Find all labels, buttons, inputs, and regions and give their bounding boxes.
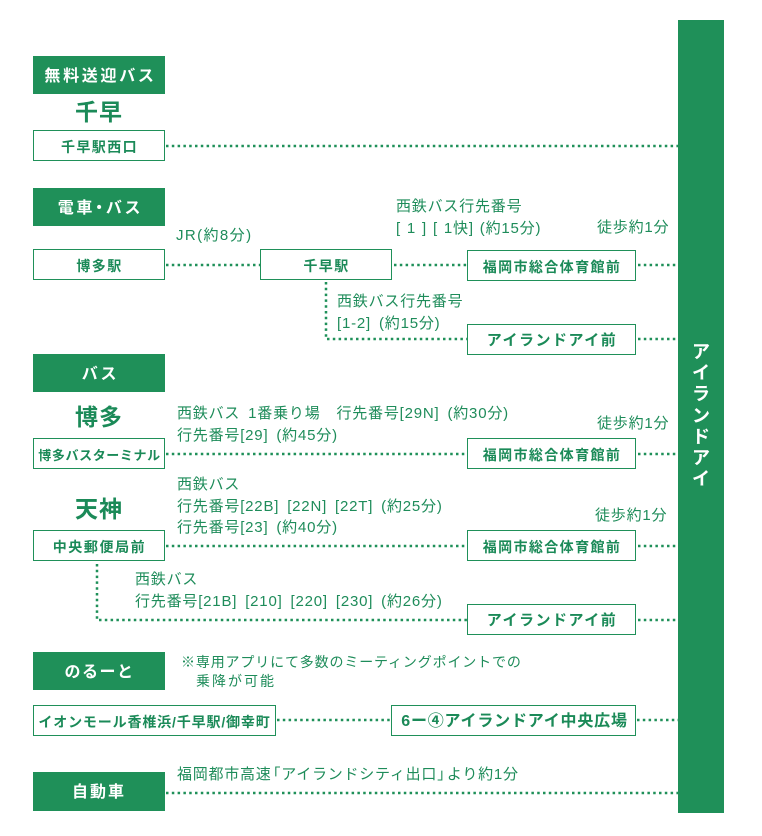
label: 西鉄バス行先番号 1-2: [337, 293, 463, 332]
heading: のるーと: のるーと: [64, 664, 134, 681]
stop: 中央郵便局前: [33, 530, 165, 561]
heading: 自動車: 自動車: [72, 784, 126, 801]
place: 千早: 千早: [75, 99, 123, 125]
destination label: ン: [692, 406, 710, 426]
note: 専用アプリ: 乗降が可能: [196, 672, 276, 688]
label: 博多 routes: [177, 405, 509, 444]
note: 専用アプリ: ※専用アプリにて多数のミーティングポイントでの: [181, 654, 522, 670]
stop: アイランドアイ前: アイランドアイ前: [487, 612, 617, 629]
stop: 福岡市総合体育館前: [467, 438, 636, 469]
label: 西鉄バス行先番号 1-2: [1-2] (約15分): [337, 314, 440, 332]
place: 博多: 博多: [75, 404, 123, 430]
label: 西鉄バス行先番号 1: [396, 198, 541, 236]
label: 福岡都市高速: 福岡都市高速「アイランドシティ出口」より約1分: [177, 766, 519, 783]
destination label: ド: [692, 427, 710, 447]
place: 天神: 天神: [75, 496, 123, 522]
stop: 千早駅: [260, 249, 392, 280]
heading: バス: [33, 354, 165, 392]
stop: 千早駅西口: [33, 130, 165, 161]
label: JR: JR(約8分): [176, 227, 252, 244]
stop: 6ー④アイランドアイ中央広場: [391, 705, 636, 736]
stop: 福岡市総合体育館前: [467, 530, 636, 561]
destination label: [692, 342, 710, 489]
destination label: イ: [692, 363, 710, 383]
heading: 電車・バス: [33, 188, 165, 226]
label: 西鉄バス 21B routes: [135, 571, 443, 610]
label: 天神 routes: 行先番号[23] (約40分): [177, 519, 338, 536]
stop: 博多バスターミナル: 博多バスターミナル: [38, 448, 161, 463]
destination label: イ: [692, 469, 710, 489]
heading: 自動車: [33, 772, 165, 811]
stop: アイランドアイ前: [467, 604, 636, 635]
heading: 無料送迎バス: 無料送迎バス: [44, 68, 157, 85]
stop: 福岡市総合体育館前: 福岡市総合体育館前: [483, 259, 621, 275]
label: 博多 routes: 西鉄バス 1番乗り場 行先番号[29N] (約30分): [177, 405, 509, 422]
heading: バス: バス: [82, 366, 119, 383]
destination label: ア: [692, 448, 710, 468]
stop: 博多バスターミナル: [33, 438, 165, 469]
label: 徒歩約1分: 徒歩約1分: [595, 507, 667, 524]
label: 徒歩約1分: 徒歩約1分: [597, 415, 669, 432]
label: 西鉄バス 21B routes: 西鉄バス: [135, 571, 198, 588]
label: 天神 routes: 行先番号[22B] [22N] [22T] (約25分): [177, 498, 443, 514]
label: 天神 routes: 西鉄バス: [177, 476, 240, 493]
label: 西鉄バス行先番号 1: [ 1 ] [ 1快] (約15分): [396, 220, 541, 236]
destination label: ア: [692, 342, 710, 362]
label: 西鉄バス行先番号 1: 西鉄バス行先番号: [396, 198, 522, 215]
label: 西鉄バス行先番号 1-2: 西鉄バス行先番号: [337, 293, 463, 310]
stop: 福岡市総合体育館前: 福岡市総合体育館前: [483, 539, 621, 555]
stop: 中央郵便局前: 中央郵便局前: [53, 539, 146, 555]
stop: 博多駅: [33, 249, 165, 280]
stop: 福岡市総合体育館前: 福岡市総合体育館前: [483, 447, 621, 463]
label: 西鉄バス 21B routes: 行先番号[21B] [210] [220] [230] (約26分): [135, 592, 443, 610]
destination bar: アイランドアイ: [678, 20, 724, 813]
stop: 千早駅: 千早駅: [303, 258, 350, 274]
stop: アイランドアイ前: [467, 324, 636, 355]
stop: 博多駅: 博多駅: [76, 258, 123, 274]
stop: イオンモール香椎浜/千早駅/御幸町: [33, 705, 276, 736]
label: 徒歩約1分: 徒歩約1分: [597, 219, 669, 236]
heading: のるーと: [33, 652, 165, 690]
stop: 福岡市総合体育館前: [467, 250, 636, 281]
stop: アイランドアイ前: アイランドアイ前: [487, 332, 617, 349]
label: 天神 routes: [177, 476, 443, 536]
stop: イオンモール香椎浜/千早駅/御幸町: イオンモール香椎浜/千早駅/御幸町: [38, 714, 271, 730]
label: 博多 routes: 行先番号[29] (約45分): [177, 427, 338, 444]
stop: 千早駅西口: 千早駅西口: [61, 139, 138, 155]
destination label: ラ: [692, 384, 710, 404]
heading: 無料送迎バス: [33, 56, 165, 94]
heading: 電車・バス: 電車・バス: [58, 200, 143, 217]
stop: 6ー④アイランドアイ中央広場: 6ー④アイランドアイ中央広場: [401, 713, 628, 730]
note: 専用アプリ: [181, 654, 522, 688]
